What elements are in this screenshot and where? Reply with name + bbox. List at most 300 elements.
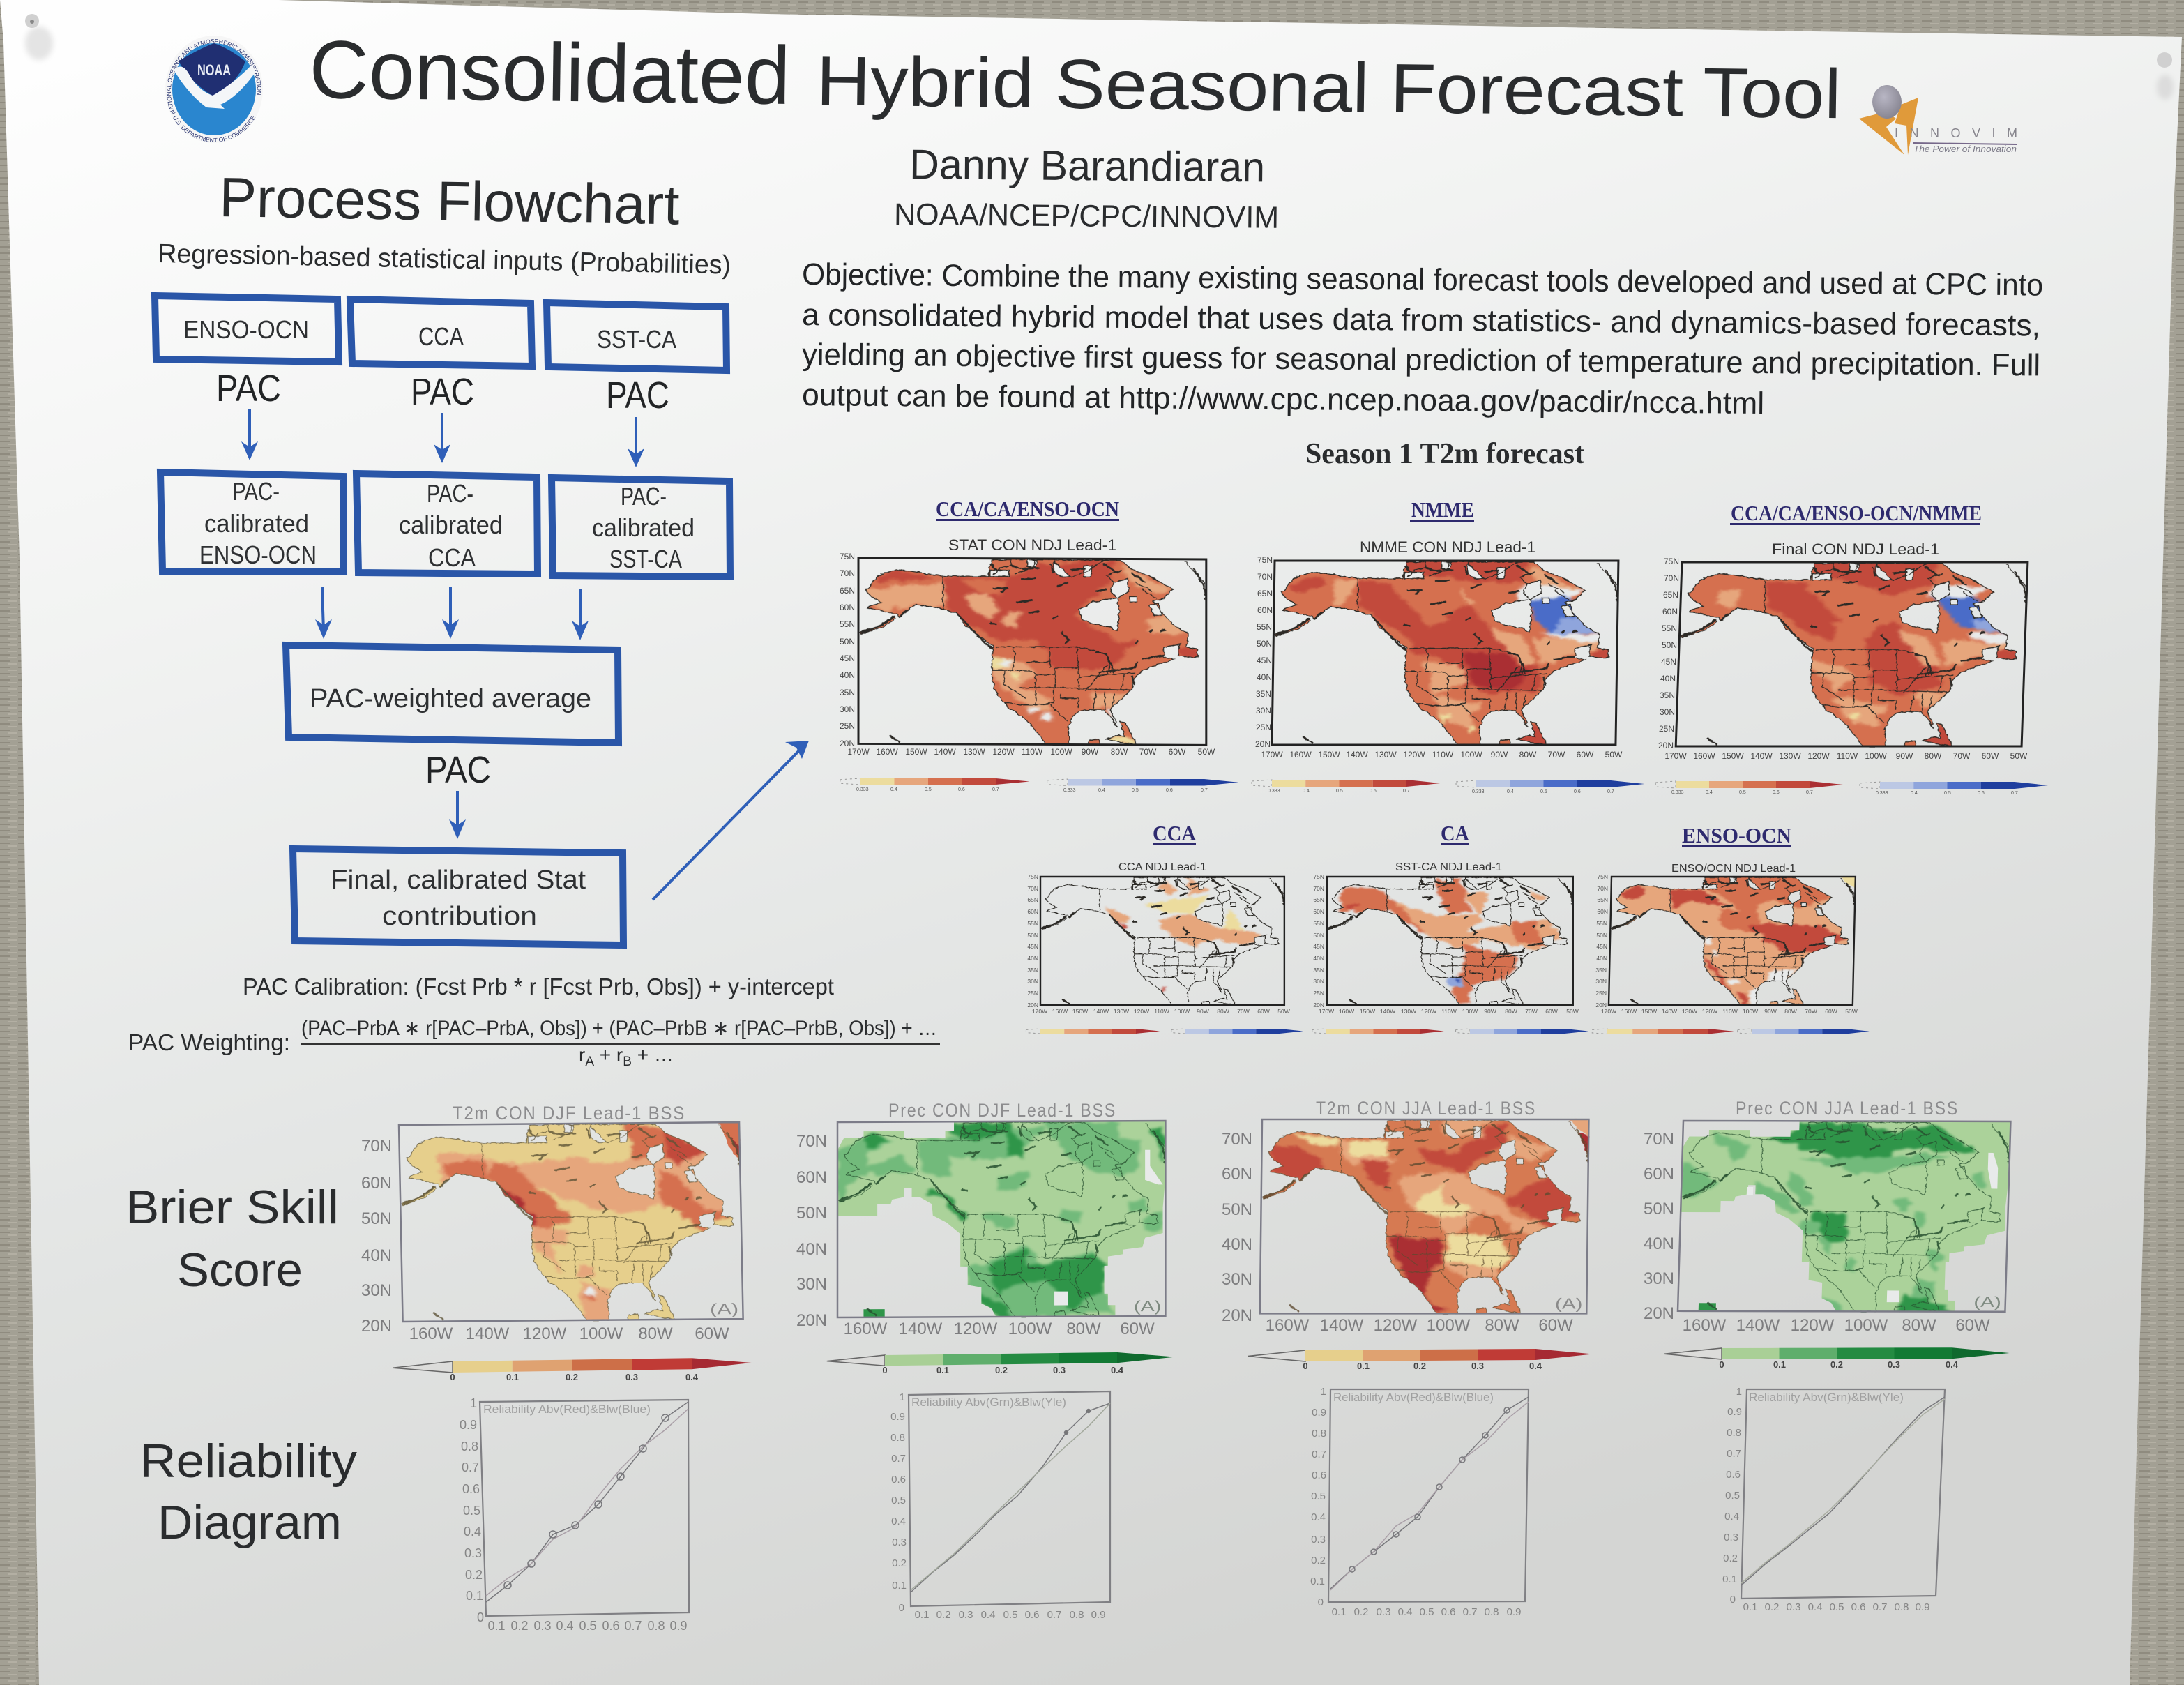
x axis labels: 0.7 — [1873, 1601, 1887, 1613]
y axis labels: 0.5 — [1725, 1490, 1740, 1502]
plot — [1741, 1389, 1945, 1599]
colour bar: below: 0.6 — [1978, 791, 1985, 796]
colour bar: above: 0.5 — [925, 787, 932, 792]
longitude labels: 160W — [1683, 1316, 1727, 1335]
latitude labels: 60N — [840, 603, 855, 612]
colour bar: above: 0.7 — [1403, 789, 1410, 794]
y axis labels: 0.7 — [462, 1460, 479, 1474]
colour bar: below: 0.7 — [1607, 789, 1614, 794]
y axis labels: 0.1 — [892, 1580, 907, 1592]
y axis labels: 0.4 — [1724, 1511, 1739, 1522]
colour bar: 0.2 — [995, 1365, 1008, 1375]
icon: INNOVIM logo: The Power of Innovation — [1913, 144, 2017, 154]
colour bar: above — [1312, 1029, 1444, 1034]
longitude labels: 70W — [1953, 751, 1971, 761]
title: T2m CON JJA Lead-1 BSS — [1316, 1098, 1536, 1119]
longitude labels: 120W — [1807, 751, 1830, 761]
x axis labels: 0.9 — [669, 1619, 688, 1633]
colour bar: below — [1738, 1029, 1870, 1034]
longitude labels: 70W — [1525, 1008, 1538, 1015]
icon: INNOVIM logo — [1859, 85, 2017, 155]
colour bar: 0.3 — [1053, 1365, 1066, 1375]
longitude labels: 80W — [638, 1324, 673, 1343]
y axis labels: 1 — [470, 1396, 477, 1410]
legend text: Reliability Abv(Grn)&Blw(Yle) — [1749, 1391, 1904, 1404]
colour bar: above: 0.7 — [992, 787, 999, 792]
map — [1271, 559, 1619, 746]
longitude labels: 100W — [579, 1324, 623, 1343]
panel: BSS T2m DJF — [361, 1103, 761, 1382]
longitude labels: 100W — [1844, 1316, 1888, 1335]
latitude labels: 30N — [1027, 978, 1038, 985]
x axis labels: 0.5 — [1420, 1606, 1434, 1618]
latitude labels: 20N — [1595, 1002, 1607, 1008]
plot — [909, 1391, 1110, 1606]
longitude labels: 70W — [1139, 747, 1157, 757]
colour bar: below — [1171, 1029, 1303, 1034]
longitude labels: 90W — [1491, 750, 1508, 760]
latitude labels: 20N — [361, 1317, 392, 1336]
text: PAC weighting formula — [128, 1017, 940, 1069]
x axis labels: 0.6 — [1441, 1606, 1455, 1618]
x axis labels: 0.5 — [579, 1619, 597, 1633]
box: final calibrated stat contribution: contribution — [382, 902, 537, 931]
latitude labels: 30N — [1256, 706, 1271, 716]
pin: top left — [25, 14, 53, 60]
latitude labels: 70N — [796, 1132, 827, 1151]
map — [837, 1121, 1165, 1320]
title — [309, 24, 1842, 133]
heading: NMME — [1411, 497, 1474, 522]
y axis labels: 0.7 — [891, 1453, 906, 1465]
box: PAC-calibrated SST-CA: PAC- — [621, 482, 667, 511]
longitude labels: 60W — [1825, 1008, 1837, 1015]
longitude labels: 160W — [844, 1320, 888, 1338]
latitude labels: 45N — [1596, 943, 1607, 950]
colour bar: above: 0.6 — [1370, 789, 1377, 794]
latitude labels: 50N — [1662, 640, 1677, 650]
colour bar: above: 0.6 — [958, 787, 965, 792]
heading: CCA/CA/ENSO-OCN/NMME — [1731, 501, 1982, 525]
y axis labels: 0.6 — [462, 1482, 480, 1496]
box: PAC-calibrated ENSO-OCN — [160, 472, 344, 572]
longitude labels: 120W — [1702, 1008, 1717, 1015]
colour bar: above: 0.5 — [1336, 789, 1343, 794]
latitude labels: 55N — [1596, 920, 1607, 927]
longitude labels: 150W — [1360, 1008, 1375, 1015]
colour bar — [1248, 1349, 1593, 1371]
colour bar: 0 — [882, 1365, 888, 1375]
panel: BSS T2m JJA — [1222, 1098, 1606, 1371]
longitude labels: 170W — [847, 747, 870, 757]
latitude labels: 25N — [1027, 990, 1038, 997]
box: PAC-calibrated CCA: PAC- — [427, 479, 473, 508]
latitude labels: 70N — [1644, 1130, 1674, 1149]
latitude labels: 20N — [796, 1311, 827, 1330]
longitude labels: 60W — [695, 1324, 729, 1343]
colour bar: above: 0.4 — [1303, 789, 1310, 794]
map: (A) — [1973, 1294, 2001, 1310]
latitude labels: 30N — [1595, 978, 1607, 985]
box: ENSO-OCN: ENSO-OCN — [183, 315, 309, 344]
text: PAC weighting formula: B — [623, 1055, 632, 1069]
text: PAC weighting formula: r — [579, 1044, 585, 1066]
latitude labels: 30N — [1313, 978, 1324, 985]
colour bar: above — [1592, 1029, 1734, 1034]
map — [1327, 877, 1573, 1005]
y axis labels: 0.3 — [1311, 1534, 1326, 1546]
text: PAC weighting formula: + r — [594, 1044, 623, 1066]
latitude labels: 50N — [1596, 932, 1607, 939]
latitude labels: 60N — [1257, 605, 1273, 615]
panel: map CCA — [1026, 821, 1303, 1034]
latitude labels: 65N — [1027, 896, 1038, 903]
x axis labels: 0.3 — [533, 1619, 552, 1633]
longitude labels: 140W — [466, 1324, 510, 1343]
latitude labels: 65N — [1597, 896, 1608, 903]
x axis labels: 0.7 — [1047, 1609, 1061, 1621]
y axis labels: 0 — [1318, 1596, 1324, 1608]
box: PAC-calibrated ENSO-OCN: calibrated — [204, 509, 309, 538]
arrow: SST-CA down — [628, 417, 644, 467]
latitude labels: 55N — [1027, 920, 1038, 927]
colour bar: 0.3 — [1888, 1359, 1900, 1370]
colour bar: 0.4 — [1111, 1365, 1124, 1375]
latitude labels: 60N — [796, 1168, 827, 1187]
y axis labels: 0.2 — [1311, 1555, 1326, 1566]
x axis labels: 0.9 — [1507, 1606, 1521, 1618]
icon: NOAA logo: NATIONAL OCEANIC AND ATMOSPHERIC ADMINISTRATION — [167, 39, 261, 114]
latitude labels: 25N — [1659, 724, 1674, 734]
y axis labels: 1 — [1736, 1386, 1742, 1398]
subtitle: Final CON NDJ Lead-1 — [1772, 541, 1939, 558]
heading: Reliability Diagram: Diagram — [158, 1496, 342, 1549]
title: Consolidated — [309, 24, 791, 122]
latitude labels: 60N — [1222, 1165, 1252, 1184]
panel: map CCA/CA/ENSO-OCN — [840, 497, 1238, 793]
latitude labels: 65N — [1663, 590, 1678, 600]
longitude labels: 120W — [1403, 750, 1425, 760]
text: objective: yielding an objective first guess for seasonal prediction of temperature and precipitation. Full — [802, 338, 2040, 382]
box: CCA — [350, 299, 532, 366]
colour bar: 0.1 — [1773, 1359, 1786, 1370]
colour bar: 0.4 — [1529, 1361, 1542, 1371]
colour bar — [393, 1357, 752, 1382]
latitude labels: 50N — [1222, 1200, 1252, 1219]
longitude labels: 130W — [1682, 1008, 1697, 1015]
x axis labels: 0.2 — [936, 1609, 950, 1621]
arrow: ENSO-OCN down — [241, 409, 258, 460]
text: PAC weighting formula: A — [585, 1055, 594, 1069]
latitude labels: 50N — [1027, 932, 1038, 939]
colour bar: above: 0.333 — [1671, 790, 1684, 795]
colour bar: below — [1860, 782, 2048, 796]
legend text: Reliability Abv(Grn)&Blw(Yle) — [911, 1396, 1066, 1409]
heading: Brier Skill Score: Score — [177, 1244, 303, 1297]
latitude labels: 65N — [840, 586, 855, 596]
y axis labels: 0.8 — [1312, 1428, 1326, 1440]
latitude labels: 50N — [1257, 639, 1272, 649]
colour bar: below: 0.333 — [1472, 789, 1485, 794]
longitude labels: 120W — [523, 1324, 567, 1343]
latitude labels: 35N — [1660, 690, 1675, 700]
map — [858, 557, 1208, 746]
y axis labels: 0.3 — [1724, 1532, 1738, 1543]
box: final calibrated stat contribution: Final, calibrated Stat — [331, 866, 586, 895]
y axis labels: 0.6 — [1726, 1469, 1741, 1481]
latitude labels: 55N — [1257, 622, 1272, 632]
latitude labels: 50N — [796, 1204, 827, 1223]
latitude labels: 70N — [1027, 885, 1038, 892]
longitude labels: 130W — [1374, 750, 1397, 760]
x axis labels: 0.6 — [602, 1619, 620, 1633]
panel: BSS Prec DJF — [796, 1100, 1175, 1375]
latitude labels: 50N — [840, 637, 855, 647]
longitude labels: 110W — [1837, 751, 1858, 761]
longitude labels: 140W — [1736, 1316, 1780, 1335]
map: (A) — [710, 1300, 738, 1317]
colour bar: below: 0.6 — [1574, 789, 1581, 794]
longitude labels: 100W — [1050, 747, 1072, 757]
longitude labels: 60W — [1169, 747, 1186, 757]
latitude labels: 30N — [1644, 1269, 1674, 1288]
longitude labels: 100W — [1865, 751, 1887, 761]
latitude labels: 30N — [840, 704, 855, 714]
y axis labels: 0 — [477, 1610, 484, 1624]
panel: reliability diagram 4 — [1722, 1386, 1945, 1613]
longitude labels: 120W — [1134, 1008, 1149, 1015]
latitude labels: 70N — [1222, 1130, 1252, 1149]
x axis labels: 0.4 — [1808, 1601, 1822, 1613]
x axis labels: 0.2 — [510, 1619, 529, 1633]
longitude labels: 150W — [1072, 1008, 1088, 1015]
y axis labels: 1 — [1321, 1386, 1326, 1398]
y axis labels: 0.4 — [891, 1516, 906, 1527]
heading: CCA/CA/ENSO-OCN — [936, 497, 1119, 521]
longitude labels: 60W — [1538, 1316, 1573, 1335]
longitude labels: 80W — [1519, 750, 1537, 760]
colour bar: 0.3 — [1471, 1361, 1484, 1371]
longitude labels: 130W — [1114, 1008, 1129, 1015]
latitude labels: 40N — [1660, 674, 1676, 683]
latitude labels: 60N — [1597, 908, 1608, 915]
heading: Brier Skill Score: Brier Skill — [126, 1181, 339, 1234]
pin: top right — [2157, 52, 2174, 100]
x axis labels: 0.3 — [1787, 1601, 1800, 1613]
longitude labels: 50W — [1198, 747, 1215, 757]
x axis labels: 0.4 — [981, 1609, 995, 1621]
box: PAC-calibrated CCA: calibrated — [399, 511, 503, 539]
y axis labels: 0.8 — [890, 1432, 905, 1444]
colour bar: 0.2 — [1830, 1359, 1843, 1370]
colour bar: below: 0.5 — [1540, 789, 1547, 794]
longitude labels: 120W — [992, 747, 1015, 757]
colour bar: above: 0.6 — [1773, 790, 1780, 795]
text: objective: a consolidated hybrid model that uses data from statistics- and dynamics-based forecasts, — [802, 298, 2040, 342]
longitude labels: 140W — [1662, 1008, 1677, 1015]
longitude labels: 60W — [1545, 1008, 1558, 1015]
latitude labels: 50N — [1644, 1200, 1674, 1218]
latitude labels: 40N — [1257, 672, 1272, 682]
latitude labels: 25N — [1313, 990, 1324, 997]
box: PAC-calibrated SST-CA: SST-CA — [609, 545, 682, 573]
box: PAC-calibrated CCA: CCA — [428, 543, 476, 572]
colour bar: below: 0.6 — [1166, 788, 1173, 793]
colour bar: below: 0.5 — [1132, 788, 1139, 793]
map — [1608, 876, 1856, 1006]
arrow: to weighted average 1 — [315, 587, 332, 639]
plot — [1328, 1389, 1529, 1602]
arrow: to weighted average 3 — [572, 589, 589, 640]
plot — [480, 1400, 689, 1616]
heading: Brier Skill Score — [126, 1181, 339, 1297]
latitude labels: 30N — [796, 1275, 827, 1294]
map — [1676, 1121, 2010, 1314]
longitude labels: 160W — [409, 1324, 453, 1343]
colour bar: 0 — [1719, 1359, 1724, 1370]
longitude labels: 80W — [1066, 1320, 1101, 1338]
latitude labels: 25N — [840, 721, 855, 731]
colour bar: above — [840, 778, 1029, 792]
box: ENSO-OCN — [155, 296, 339, 362]
colour bar: 0 — [450, 1372, 455, 1382]
colour bar: below: 0.333 — [1876, 791, 1888, 796]
latitude labels: 20N — [1255, 739, 1271, 749]
x axis labels: 0.1 — [487, 1619, 506, 1633]
box: PAC-weighted average — [286, 645, 619, 743]
y axis labels: 0.8 — [1727, 1427, 1741, 1439]
y axis labels: 0.1 — [1310, 1576, 1325, 1587]
latitude labels: 70N — [361, 1137, 392, 1156]
longitude labels: 50W — [2010, 751, 2028, 761]
panel: reliability diagram 1 — [460, 1396, 689, 1633]
latitude labels: 45N — [840, 653, 855, 663]
longitude labels: 120W — [1791, 1316, 1835, 1335]
latitude labels: 35N — [1595, 967, 1607, 974]
label: PAC 4: PAC — [425, 749, 491, 791]
longitude labels: 60W — [1982, 751, 1999, 761]
arrow: CCA down — [434, 413, 450, 463]
longitude labels: 160W — [876, 747, 898, 757]
latitude labels: 45N — [1313, 943, 1324, 950]
latitude labels: 75N — [1597, 873, 1608, 880]
longitude labels: 80W — [1111, 747, 1128, 757]
longitude labels: 120W — [954, 1320, 998, 1338]
latitude labels: 45N — [1257, 656, 1272, 665]
latitude labels: 60N — [1313, 908, 1324, 915]
latitude labels: 40N — [1027, 955, 1038, 962]
longitude labels: 170W — [1319, 1008, 1334, 1015]
label: PAC 2: PAC — [411, 371, 474, 413]
colour bar: below: 0.5 — [1944, 791, 1951, 796]
longitude labels: 80W — [1902, 1316, 1936, 1335]
x axis labels: 0.8 — [647, 1619, 665, 1633]
latitude labels: 75N — [1313, 873, 1324, 880]
y axis labels: 0.4 — [464, 1525, 481, 1539]
longitude labels: 140W — [1380, 1008, 1395, 1015]
latitude labels: 35N — [840, 688, 855, 697]
colour bar: 0.1 — [936, 1365, 949, 1375]
colour bar: above: 0.333 — [856, 787, 869, 792]
x axis labels: 0.1 — [1332, 1606, 1346, 1618]
latitude labels: 70N — [1597, 885, 1608, 892]
y axis labels: 0.8 — [461, 1440, 478, 1453]
box: PAC-calibrated ENSO-OCN: ENSO-OCN — [199, 541, 317, 569]
longitude labels: 170W — [1032, 1008, 1047, 1015]
colour bar: above: 0.4 — [1706, 790, 1713, 795]
longitude labels: 160W — [1621, 1008, 1637, 1015]
latitude labels: 45N — [1027, 943, 1038, 950]
latitude labels: 55N — [840, 619, 855, 629]
latitude labels: 50N — [361, 1209, 392, 1228]
longitude labels: 60W — [1257, 1008, 1270, 1015]
longitude labels: 130W — [1401, 1008, 1416, 1015]
y axis labels: 0.2 — [1723, 1552, 1738, 1564]
longitude labels: 110W — [1022, 747, 1043, 757]
box: PAC-calibrated CCA — [356, 474, 538, 574]
longitude labels: 140W — [934, 747, 956, 757]
latitude labels: 35N — [1256, 689, 1271, 699]
longitude labels: 140W — [899, 1320, 943, 1338]
colour bar: 0.4 — [685, 1372, 699, 1382]
x axis labels: 0.3 — [1377, 1606, 1390, 1618]
longitude labels: 100W — [1743, 1008, 1758, 1015]
latitude labels: 75N — [1664, 557, 1679, 566]
arrow: to final — [449, 791, 466, 839]
colour bar: below — [1047, 779, 1238, 793]
latitude labels: 30N — [361, 1281, 392, 1300]
x axis labels: 0.6 — [1851, 1601, 1865, 1613]
y axis labels: 0.9 — [890, 1411, 905, 1423]
longitude labels: 80W — [1485, 1316, 1519, 1335]
longitude labels: 130W — [1779, 751, 1801, 761]
colour bar: below: 0.4 — [1098, 788, 1105, 793]
longitude labels: 80W — [1217, 1008, 1229, 1015]
panel: flowchart — [155, 296, 809, 945]
y axis labels: 0.3 — [892, 1536, 907, 1548]
x axis labels: 0.5 — [1830, 1601, 1844, 1613]
map — [397, 1121, 744, 1322]
box: SST-CA: SST-CA — [597, 325, 676, 354]
subtitle: STAT CON NDJ Lead-1 — [948, 536, 1116, 554]
icon: NOAA logo: U.S. DEPARTMENT OF COMMERCE — [173, 116, 255, 142]
x axis labels: 0.1 — [915, 1609, 929, 1621]
y axis labels: 0.9 — [1727, 1406, 1742, 1418]
text: objective: Objective: Combine the many existing seasonal forecast tools developed and used at CPC into — [802, 257, 2043, 303]
longitude labels: 170W — [1601, 1008, 1616, 1015]
arrow: to weighted average 2 — [442, 587, 459, 639]
text: PAC weighting formula: + … — [632, 1044, 674, 1066]
subtitle: ENSO/OCN NDJ Lead-1 — [1671, 863, 1796, 875]
colour bar: below: 0.333 — [1063, 788, 1076, 793]
colour bar: above — [1655, 781, 1843, 795]
y axis labels: 0.2 — [892, 1557, 907, 1569]
subtitle: SST-CA NDJ Lead-1 — [1395, 861, 1502, 873]
longitude labels: 110W — [1154, 1008, 1169, 1015]
longitude labels: 90W — [1484, 1008, 1496, 1015]
map — [1675, 561, 2029, 748]
latitude labels: 60N — [1644, 1165, 1674, 1184]
text: inputs caption: Regression-based statistical inputs (Probabilities) — [158, 239, 731, 280]
latitude labels: 50N — [1313, 932, 1324, 939]
text: author: Danny Barandiaran — [909, 141, 1265, 190]
colour bar — [1664, 1347, 2010, 1370]
map — [1040, 877, 1284, 1005]
box: PAC-weighted average: PAC-weighted average — [310, 684, 591, 713]
box: CCA: CCA — [418, 322, 464, 351]
text: PAC calibration formula: PAC Calibration: (Fcst Prb * r [Fcst Prb, Obs]) + y-intercept — [243, 974, 834, 999]
colour bar: below: 0.7 — [2011, 791, 2018, 796]
